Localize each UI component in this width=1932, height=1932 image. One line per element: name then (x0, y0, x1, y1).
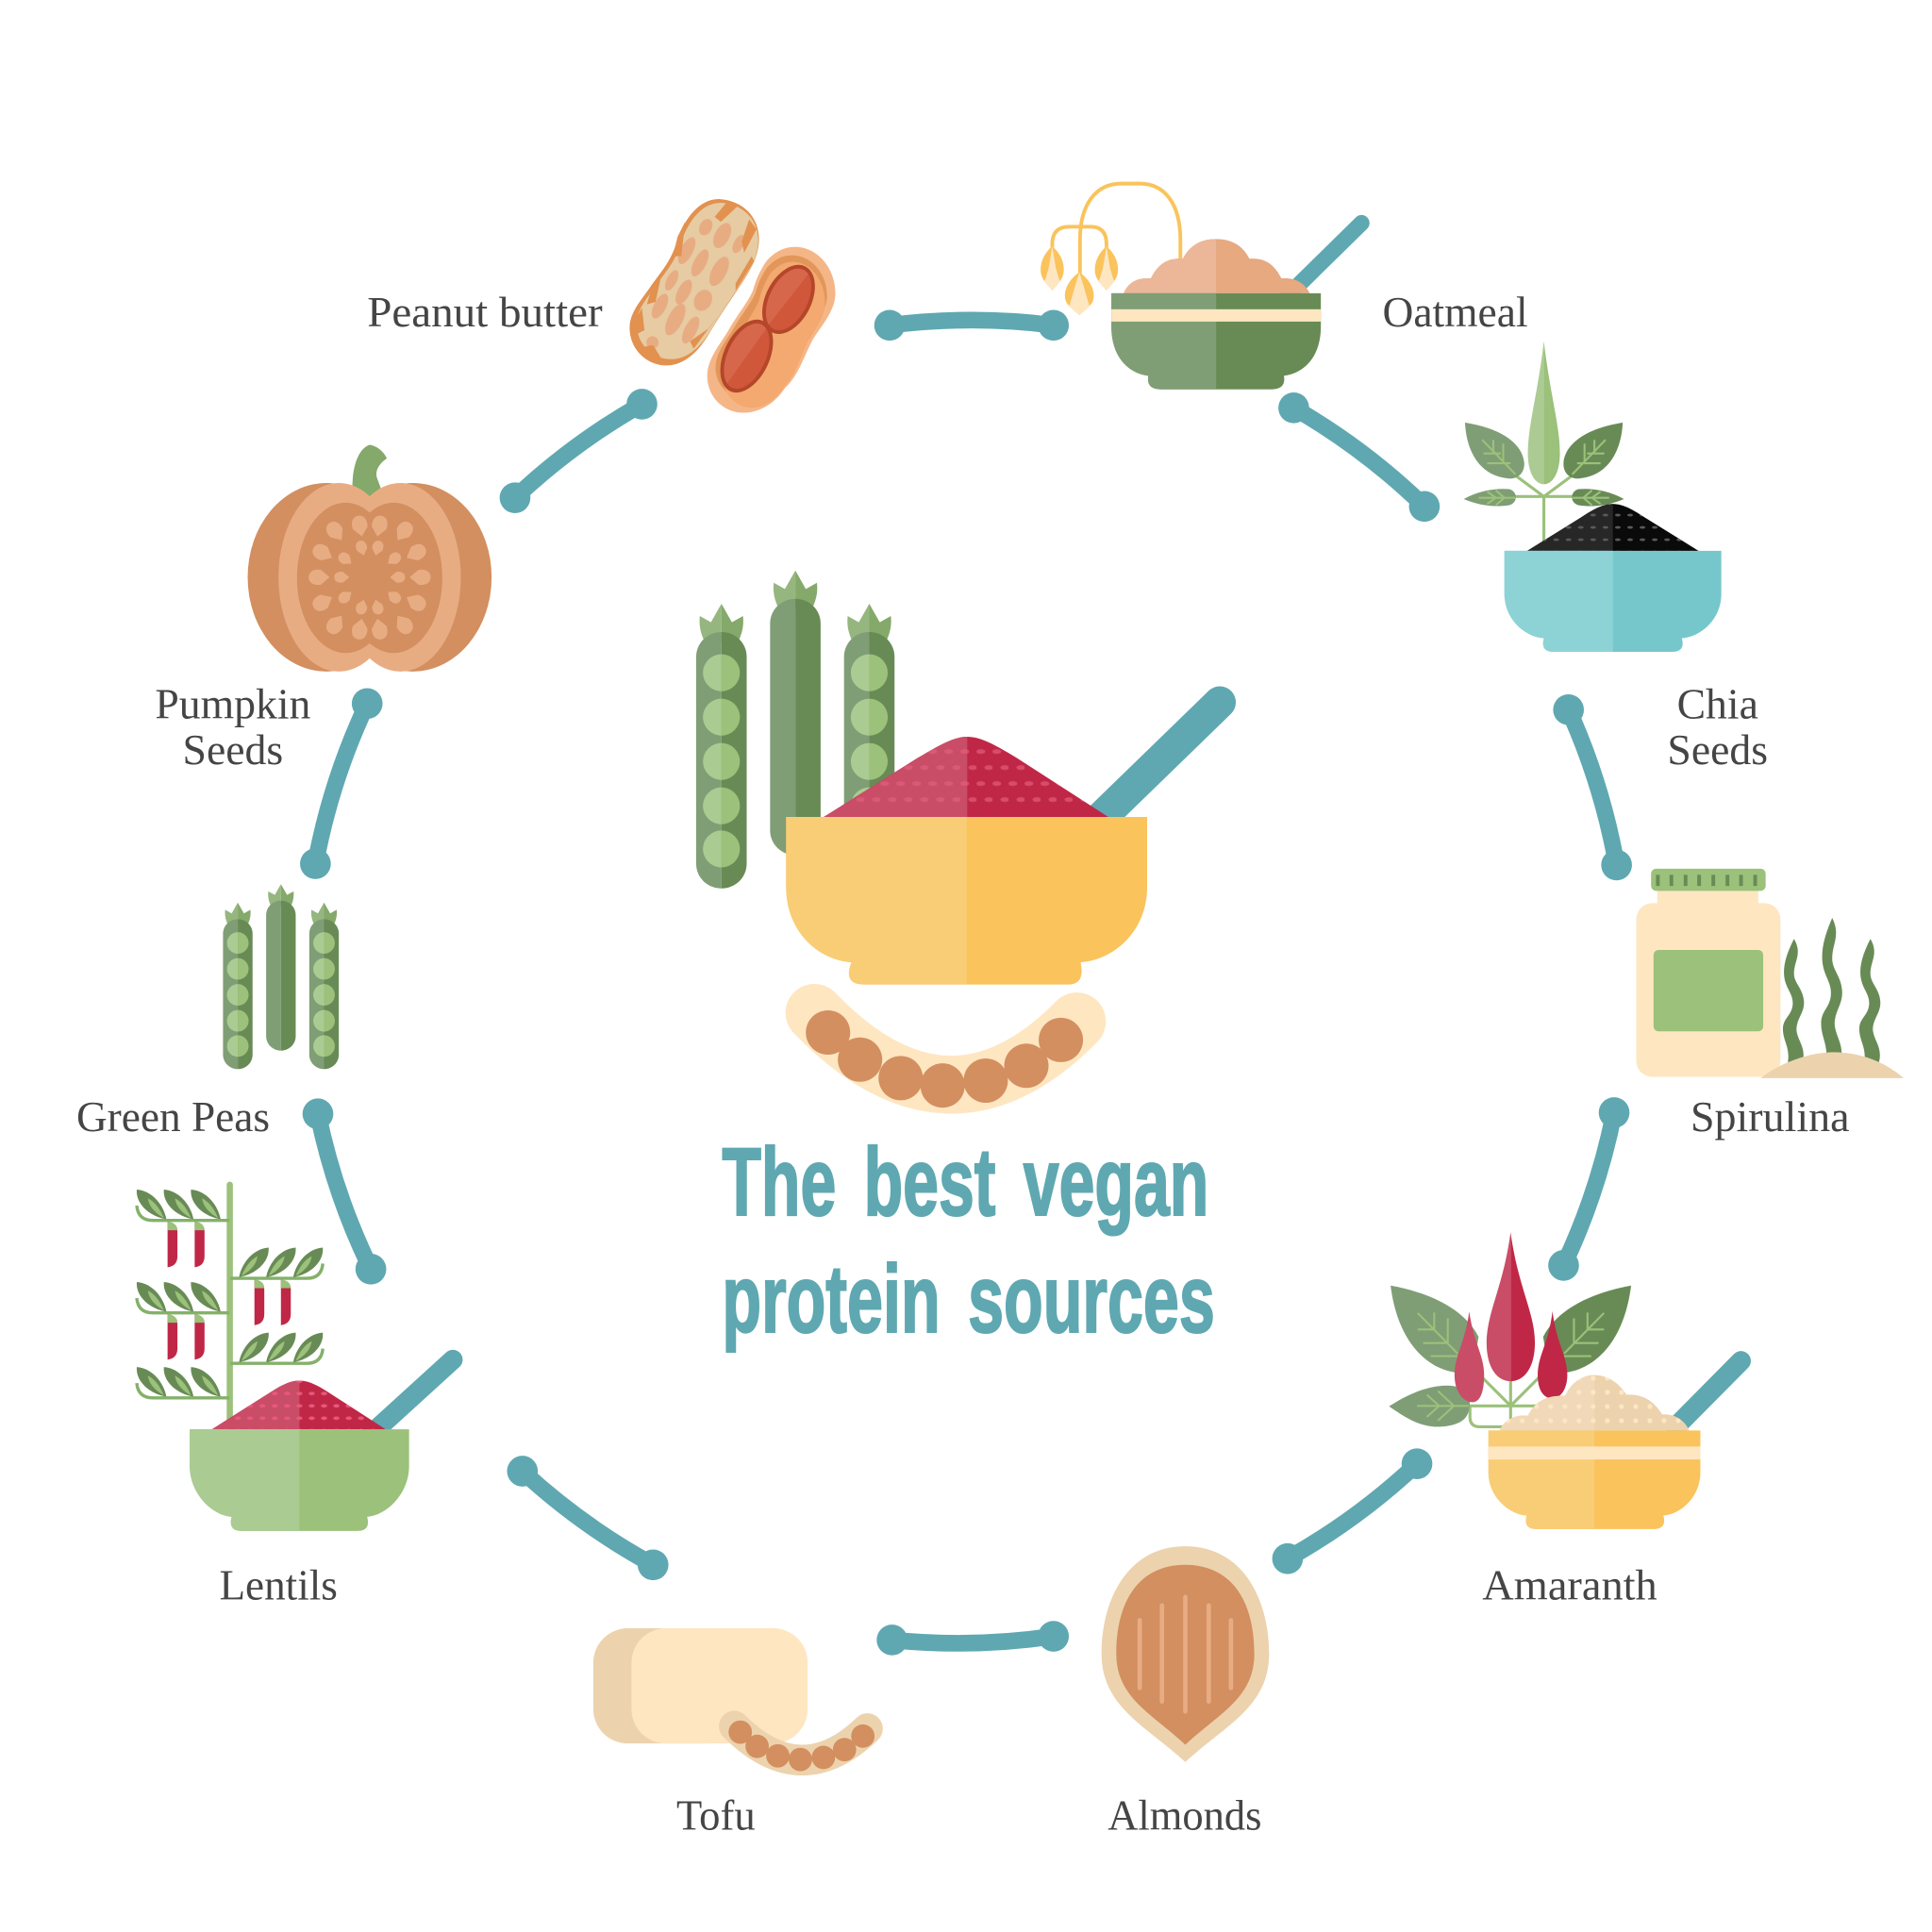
label: almonds: Almonds (1108, 1791, 1261, 1840)
icon: lentil spoon (370, 1359, 453, 1436)
connector: pumpkin to peanut (500, 389, 658, 513)
icon: amaranth bowl (1489, 1430, 1700, 1529)
label: oatmeal: Oatmeal (1382, 288, 1528, 336)
connector: almonds to tofu (876, 1621, 1069, 1656)
icon: central bean pod (806, 1010, 1083, 1108)
title: protein sources (722, 1245, 1215, 1353)
connector: green peas to pumpkin (300, 688, 383, 879)
icon: central spoon (1091, 702, 1220, 828)
icon: almond (1102, 1546, 1269, 1762)
icon: pumpkin stem (353, 445, 387, 498)
icon: peanut (629, 199, 836, 413)
connector: lentils to green peas (303, 1098, 386, 1285)
icon: lentils (137, 1182, 453, 1531)
icon: pumpkin (248, 445, 491, 672)
icon: small bean pod (728, 1721, 874, 1772)
icon: amaranth spoon (1675, 1361, 1741, 1426)
label: lentils: Lentils (219, 1560, 338, 1608)
connector: oatmeal to chia (1278, 392, 1440, 522)
icon: amaranth plant (1389, 1232, 1631, 1436)
icon: oatmeal bowl (1111, 293, 1321, 390)
icon: central bowl body (786, 817, 1147, 985)
icon: tofu (593, 1628, 874, 1772)
icon: spirulina (1637, 869, 1904, 1078)
icon: lentil plant (137, 1182, 323, 1434)
icon: lentil mound (212, 1381, 386, 1429)
icon: chia bowl (1505, 551, 1722, 652)
icon: oatmeal (1041, 184, 1361, 390)
icon: whole peanut shell (629, 199, 759, 365)
label: pumpkin seeds: Pumpkin (155, 679, 311, 727)
icon: central bowl with pods and beans (696, 571, 1220, 1108)
icon: lentil bowl (190, 1429, 409, 1531)
icon: tofu block (593, 1628, 808, 1743)
connector: tofu to lentils (507, 1456, 669, 1580)
icon: green peas (223, 884, 339, 1069)
icon: chia plant (1464, 341, 1624, 551)
icon: amaranth (1389, 1232, 1741, 1529)
icon: chia seed mound (1525, 504, 1700, 552)
label: chia seeds: Seeds (1667, 725, 1768, 774)
label: chia seeds: Chia (1677, 679, 1758, 727)
icon: oatmeal mound (1124, 239, 1309, 293)
connector: chia to spirulina (1553, 694, 1632, 880)
icon: jar (1637, 869, 1780, 1077)
connector: amaranth to almonds (1273, 1448, 1432, 1574)
icon: chia (1464, 341, 1722, 652)
icon: seaweed (1783, 918, 1880, 1062)
icon: pumpkin body (248, 483, 491, 672)
label: peanut butter: Peanut butter (367, 288, 603, 336)
icon: sand mound (1760, 1052, 1904, 1078)
icon: open peanut shell (708, 247, 836, 413)
title (722, 1128, 1215, 1353)
title: The best vegan (722, 1128, 1208, 1236)
icon: central powder mound (822, 737, 1110, 818)
icon: oatmeal spoon (1288, 223, 1361, 295)
label: amaranth: Amaranth (1482, 1560, 1657, 1608)
icon: central pods (696, 571, 894, 889)
icon: pumpkin seeds (308, 514, 430, 641)
label: tofu: Tofu (676, 1791, 756, 1840)
connector: spirulina to amaranth (1548, 1097, 1629, 1281)
icon: amaranth mound (1500, 1375, 1690, 1430)
label: pumpkin seeds: Seeds (183, 725, 283, 774)
icon: oat stalk (1041, 184, 1180, 315)
label: spirulina: Spirulina (1690, 1092, 1849, 1141)
label: green peas: Green Peas (76, 1092, 270, 1141)
connector: peanut butter to oatmeal (874, 309, 1069, 341)
icon: peanut kernels (709, 257, 825, 401)
